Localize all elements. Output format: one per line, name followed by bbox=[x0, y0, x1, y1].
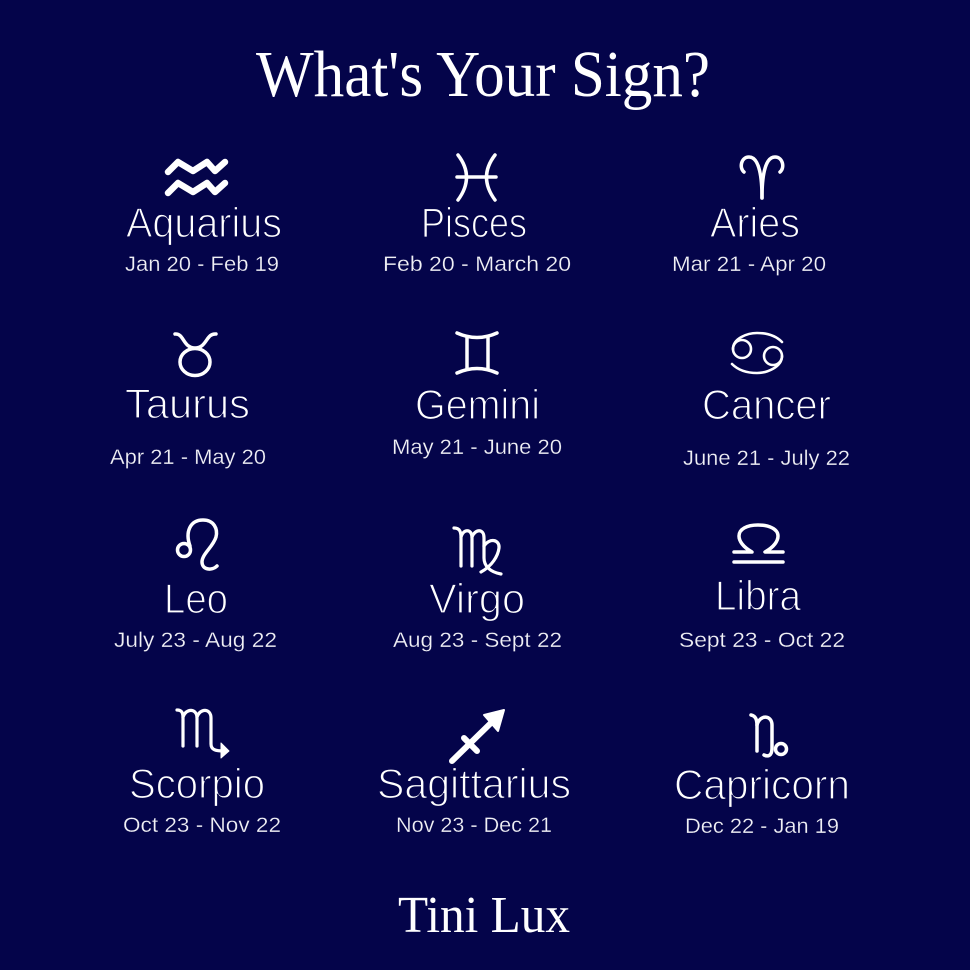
icon: Leo bbox=[178, 520, 217, 569]
icon: Gemini bbox=[457, 333, 497, 373]
name: Libra: Libra bbox=[715, 572, 802, 619]
panel: Pisces bbox=[383, 155, 571, 276]
name: Cancer: Cancer bbox=[702, 381, 831, 428]
brand name: Tini Lux bbox=[398, 887, 570, 944]
name: Gemini: Gemini bbox=[415, 381, 540, 428]
name: Aquarius: Aquarius bbox=[126, 199, 282, 246]
icon: Taurus bbox=[175, 334, 216, 376]
name: Scorpio: Scorpio bbox=[129, 760, 265, 807]
title: What's Your Sign? bbox=[256, 38, 710, 111]
dates: Pisces: Feb 20 - March 20 bbox=[383, 253, 571, 276]
panel: Cancer bbox=[683, 333, 850, 470]
dates: Sagittarius: Nov 23 - Dec 21 bbox=[396, 814, 552, 837]
icon: Capricorn bbox=[751, 715, 786, 756]
panel: Gemini bbox=[392, 333, 562, 459]
icon: Aries bbox=[741, 157, 783, 198]
icon: Scorpio bbox=[177, 710, 229, 758]
panel: Libra bbox=[679, 525, 845, 652]
panel: Leo bbox=[114, 520, 277, 652]
dates: Taurus: Apr 21 - May 20 bbox=[110, 446, 266, 469]
panel: Sagittarius bbox=[377, 710, 571, 837]
dates: Capricorn: Dec 22 - Jan 19 bbox=[685, 815, 839, 838]
name: Aries: Aries bbox=[710, 199, 800, 246]
dates: Aquarius: Jan 20 - Feb 19 bbox=[125, 253, 279, 276]
name: Sagittarius: Sagittarius bbox=[377, 760, 571, 807]
icon: Libra bbox=[734, 525, 783, 562]
dates: Virgo: Aug 23 - Sept 22 bbox=[393, 629, 562, 652]
icon: Aquarius bbox=[168, 162, 225, 193]
dates: Gemini: May 21 - June 20 bbox=[392, 436, 562, 459]
dates: Scorpio: Oct 23 - Nov 22 bbox=[123, 814, 281, 837]
dates: Libra: Sept 23 - Oct 22 bbox=[679, 629, 845, 652]
panel: Aries bbox=[672, 157, 826, 276]
panel: Taurus bbox=[110, 334, 266, 469]
icon: Sagittarius bbox=[452, 710, 504, 761]
panel: Aquarius bbox=[125, 162, 282, 276]
name: Pisces: Pisces bbox=[421, 199, 527, 246]
name: Capricorn: Capricorn bbox=[674, 761, 850, 808]
icon: Virgo bbox=[454, 528, 501, 574]
icon: Pisces bbox=[457, 155, 496, 200]
icon: Cancer bbox=[732, 333, 782, 373]
dates: Leo: July 23 - Aug 22 bbox=[114, 629, 277, 652]
dates: Aries: Mar 21 - Apr 20 bbox=[672, 253, 826, 276]
dates: Cancer: June 21 - July 22 bbox=[683, 447, 850, 470]
name: Leo: Leo bbox=[164, 575, 228, 622]
panel: Capricorn bbox=[674, 715, 850, 838]
name: Virgo: Virgo bbox=[429, 575, 525, 622]
panel: Virgo bbox=[393, 528, 562, 652]
name: Taurus: Taurus bbox=[125, 380, 250, 427]
panel: Scorpio bbox=[123, 710, 281, 837]
